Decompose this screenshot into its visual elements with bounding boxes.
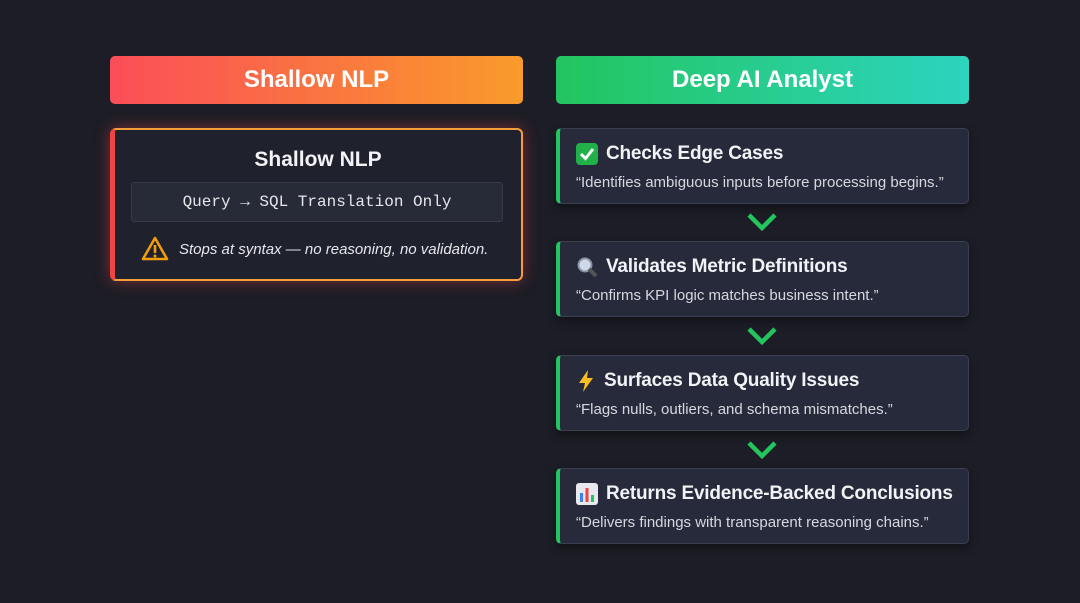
card: metric definitions: [556, 241, 969, 317]
card: edge cases: [556, 128, 969, 204]
card: metric definitions: Validates Metric Definitions: [606, 256, 847, 277]
card: data quality: [556, 355, 969, 431]
warning text: [142, 236, 488, 260]
card: metric definitions: “Confirms KPI logic matches business intent.”: [576, 287, 879, 304]
arrow: [748, 327, 776, 345]
header: Deep AI Analyst: [556, 56, 969, 104]
card: data quality: Surfaces Data Quality Issues: [604, 370, 859, 391]
warning text: Stops at syntax — no reasoning, no validation.: [179, 240, 488, 258]
icon: warning: [142, 236, 168, 260]
header: Shallow NLP: Shallow NLP: [244, 66, 389, 93]
card: conclusions: Returns Evidence-Backed Conclusions: [606, 483, 953, 504]
code box: Query → SQL Translation Only: [183, 193, 451, 211]
panel: shallow NLP: [110, 128, 523, 281]
card: conclusions: [556, 468, 969, 544]
card: edge cases: Checks Edge Cases: [606, 143, 783, 164]
code box: [131, 182, 503, 222]
heading: Shallow NLP: [254, 148, 382, 171]
card: conclusions: “Delivers findings with transparent reasoning chains.”: [576, 514, 929, 531]
arrow: [748, 213, 776, 231]
header: Deep AI Analyst: Deep AI Analyst: [672, 66, 853, 93]
arrow: [748, 441, 776, 459]
header: Shallow NLP: [110, 56, 523, 104]
card: data quality: “Flags nulls, outliers, and schema mismatches.”: [576, 401, 893, 418]
card: edge cases: “Identifies ambiguous inputs before processing begins.”: [576, 174, 944, 191]
